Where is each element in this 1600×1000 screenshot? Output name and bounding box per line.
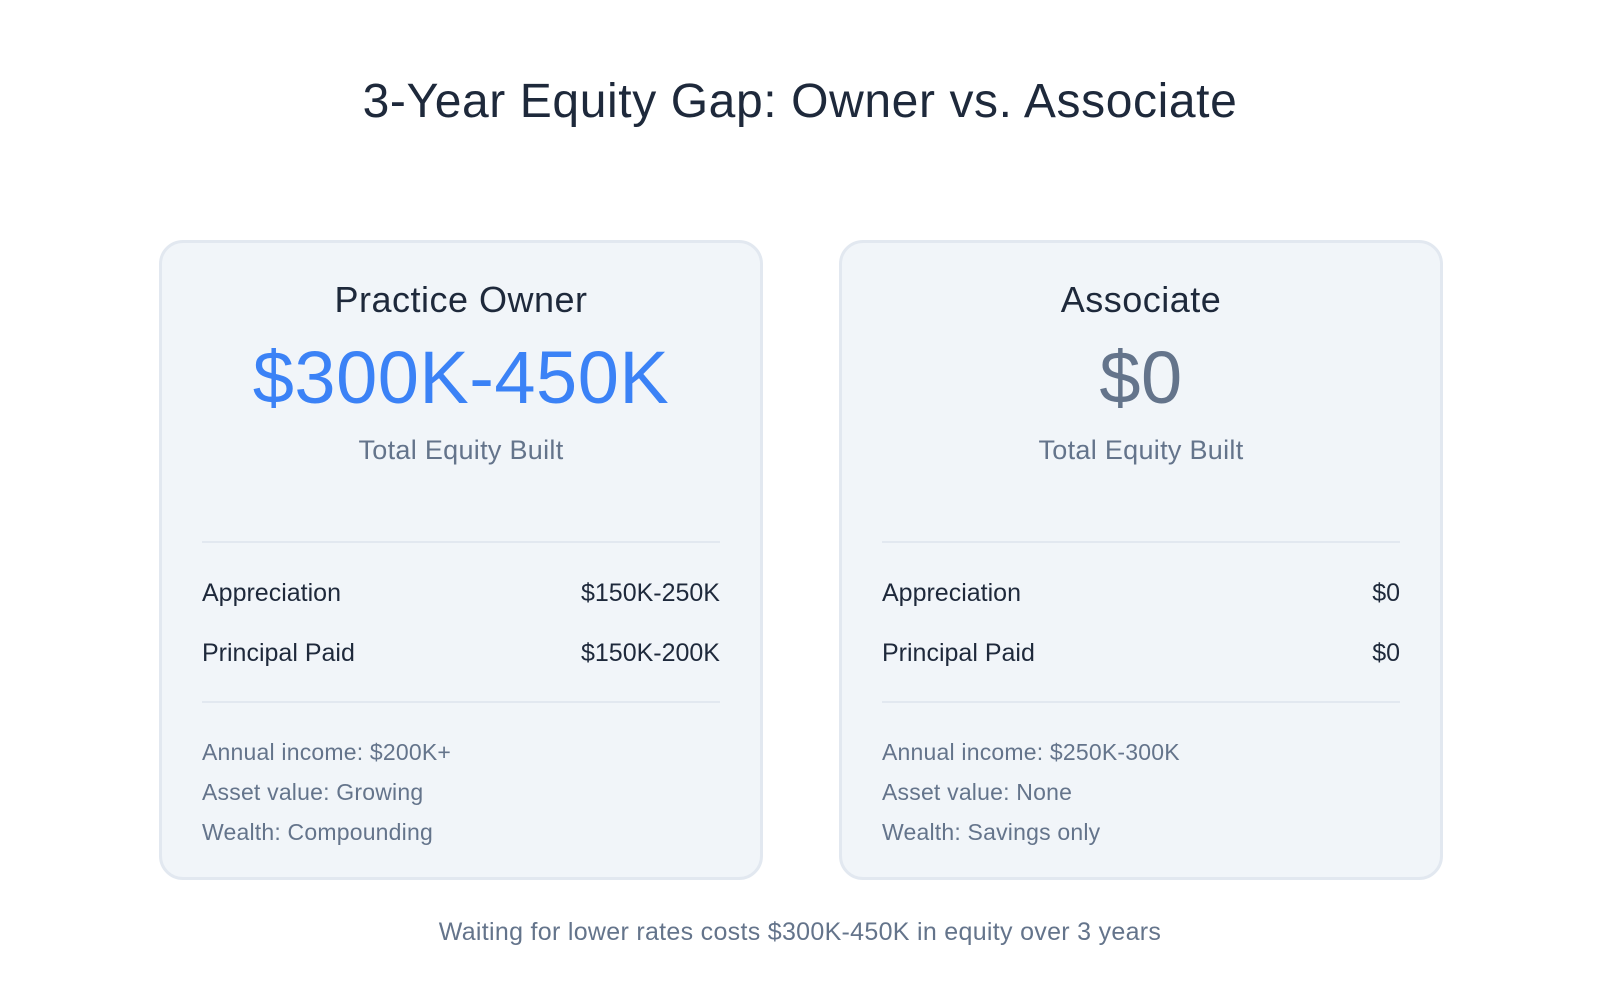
row: principal: $150K-200K xyxy=(581,639,720,667)
notes: Annual income: $250K-300K xyxy=(882,739,1180,765)
row: appreciation: Appreciation xyxy=(202,579,341,607)
row: principal: Principal Paid xyxy=(202,639,355,667)
footer: Waiting for lower rates costs $300K-450K in equity over 3 years xyxy=(439,918,1161,946)
notes: Wealth: Savings only xyxy=(882,819,1100,845)
row: appreciation: $0 xyxy=(1372,579,1400,607)
panel: associate xyxy=(839,240,1443,880)
row: appreciation xyxy=(882,579,1400,607)
subtitle: Total Equity Built xyxy=(1038,435,1244,465)
notes xyxy=(202,739,451,845)
notes: Asset value: None xyxy=(882,779,1072,805)
row: appreciation: Appreciation xyxy=(882,579,1021,607)
card heading: Practice Owner xyxy=(334,279,588,320)
big number: $0 xyxy=(1099,336,1183,419)
title: 3-Year Equity Gap: Owner vs. Associate xyxy=(363,75,1237,128)
notes: Annual income: $200K+ xyxy=(202,739,451,765)
row: principal xyxy=(882,639,1400,667)
panel: practice owner xyxy=(159,240,763,880)
notes xyxy=(882,739,1180,845)
notes: Wealth: Compounding xyxy=(202,819,433,845)
row: principal xyxy=(202,639,720,667)
row: principal: $0 xyxy=(1372,639,1400,667)
row: principal: Principal Paid xyxy=(882,639,1035,667)
card heading: Associate xyxy=(1061,279,1221,320)
row: appreciation: $150K-250K xyxy=(581,579,720,607)
subtitle: Total Equity Built xyxy=(358,435,564,465)
big number: $300K-450K xyxy=(253,336,669,419)
notes: Asset value: Growing xyxy=(202,779,423,805)
row: appreciation xyxy=(202,579,720,607)
